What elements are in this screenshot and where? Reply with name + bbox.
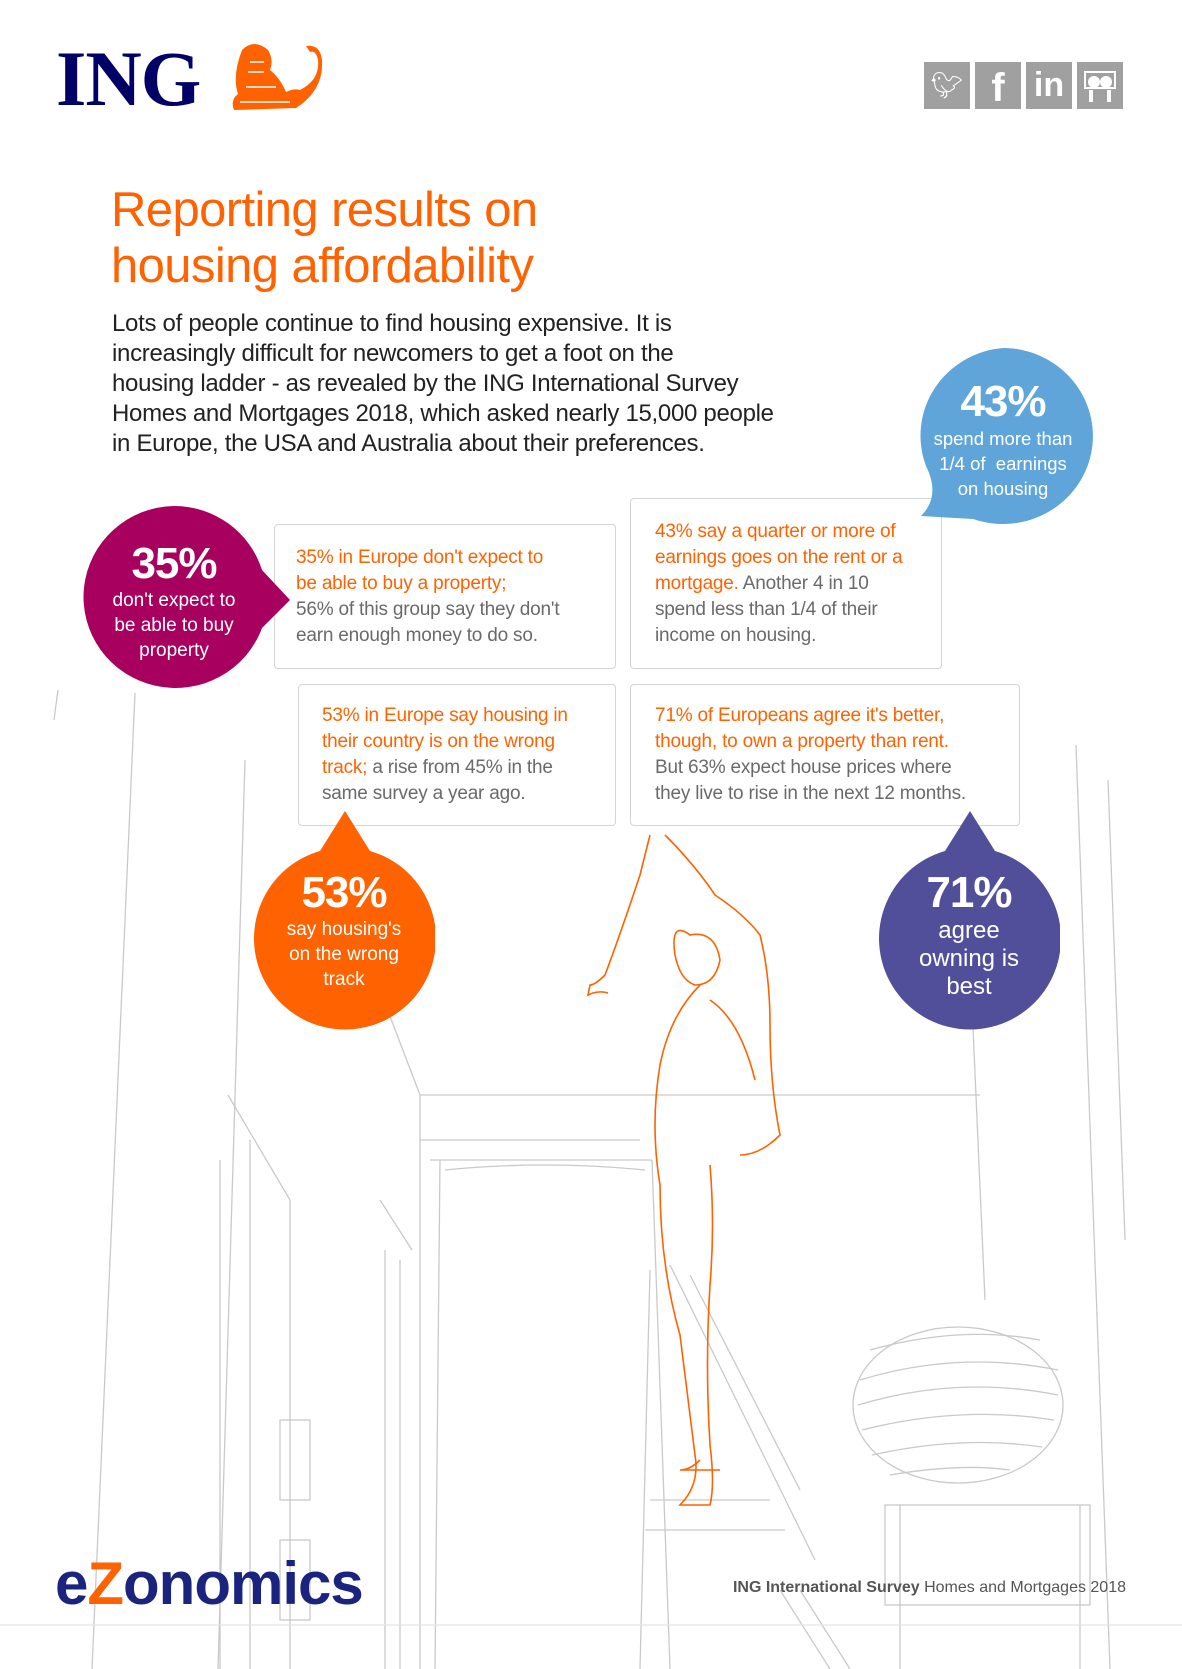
bubble: 53%: on the wrong xyxy=(289,944,399,965)
bubble: 43%: 1/4 of earnings xyxy=(939,453,1067,474)
box 4 xyxy=(630,684,1020,826)
box 2: earnings goes on the rent or a xyxy=(655,547,903,568)
title: housing affordability xyxy=(111,239,533,293)
intro text: increasingly difficult for newcomers to get a foot on the xyxy=(112,340,673,367)
bubble: 43%: spend more than xyxy=(934,428,1072,449)
icon: facebook: f xyxy=(991,66,1005,110)
bubble: 53%: 53% xyxy=(301,868,387,917)
box 2 xyxy=(630,498,942,669)
bubble: 43%: on housing xyxy=(958,478,1048,499)
bubble: 71%: best xyxy=(946,973,992,1000)
intro text: housing ladder - as revealed by the ING International Survey xyxy=(112,370,738,397)
intro text: Lots of people continue to find housing expensive. It is xyxy=(112,310,672,337)
intro text: in Europe, the USA and Australia about their preferences. xyxy=(112,430,705,457)
bubble: 35% xyxy=(84,506,290,688)
bubble: 71% xyxy=(879,811,1060,1030)
icon: linkedin: in xyxy=(1034,66,1064,104)
box 3 xyxy=(298,684,616,826)
bubble: 35%: be able to buy xyxy=(114,615,234,636)
box 4: But 63% expect house prices where xyxy=(655,757,952,778)
icon: lion xyxy=(232,44,322,110)
box 3: track; a rise from 45% in the xyxy=(322,757,553,778)
logo: eZonomics: eZonomics xyxy=(55,1550,363,1617)
box 4: though, to own a property than rent. xyxy=(655,731,949,752)
icon: linkedin xyxy=(1026,62,1072,109)
bubble: 71%: agree xyxy=(938,917,1000,944)
box 1: be able to buy a property; xyxy=(296,573,506,594)
bubble: 53%: say housing's xyxy=(287,919,401,940)
box 1 xyxy=(274,524,616,669)
footer source: ING International Survey Homes and Mortgages 2018 xyxy=(733,1579,1126,1596)
icon: twitter xyxy=(924,62,970,109)
box 2: 43% say a quarter or more of xyxy=(655,521,895,542)
icon: facebook xyxy=(975,62,1021,109)
bubble: 35%: 35% xyxy=(131,539,217,588)
box 3: their country is on the wrong xyxy=(322,731,555,752)
social icons xyxy=(924,62,1123,110)
box 1: 56% of this group say they don't xyxy=(296,599,559,620)
box 2: spend less than 1/4 of their xyxy=(655,599,878,620)
logo: ING: ING xyxy=(56,35,200,122)
bubble: 35%: property xyxy=(139,640,209,661)
box 1: 35% in Europe don't expect to xyxy=(296,547,543,568)
bubble: 43% xyxy=(920,348,1093,524)
logo: ING xyxy=(56,35,322,122)
box 3: same survey a year ago. xyxy=(322,783,525,804)
box 2: income on housing. xyxy=(655,625,816,646)
intro text: Homes and Mortgages 2018, which asked nearly 15,000 people xyxy=(112,400,774,427)
icon: slideshare xyxy=(1077,62,1123,109)
box 3: 53% in Europe say housing in xyxy=(322,705,568,726)
title: Reporting results on xyxy=(111,183,538,237)
orange woman outline xyxy=(588,835,780,1505)
bubble: 53% xyxy=(254,811,435,1030)
bubble: 53%: track xyxy=(323,969,365,990)
box 1: earn enough money to do so. xyxy=(296,625,538,646)
box 4: they live to rise in the next 12 months. xyxy=(655,783,966,804)
box 2: mortgage. Another 4 in 10 xyxy=(655,573,869,594)
box 4: 71% of Europeans agree it's better, xyxy=(655,705,944,726)
bubble: 43%: 43% xyxy=(960,377,1046,426)
icon: twitter: 🐦︎ xyxy=(930,70,964,100)
title xyxy=(111,183,538,293)
intro text xyxy=(112,310,774,457)
bubble: 71%: 71% xyxy=(926,868,1012,917)
bubble: 35%: don't expect to xyxy=(112,590,236,611)
bubble: 71%: owning is xyxy=(919,945,1019,972)
